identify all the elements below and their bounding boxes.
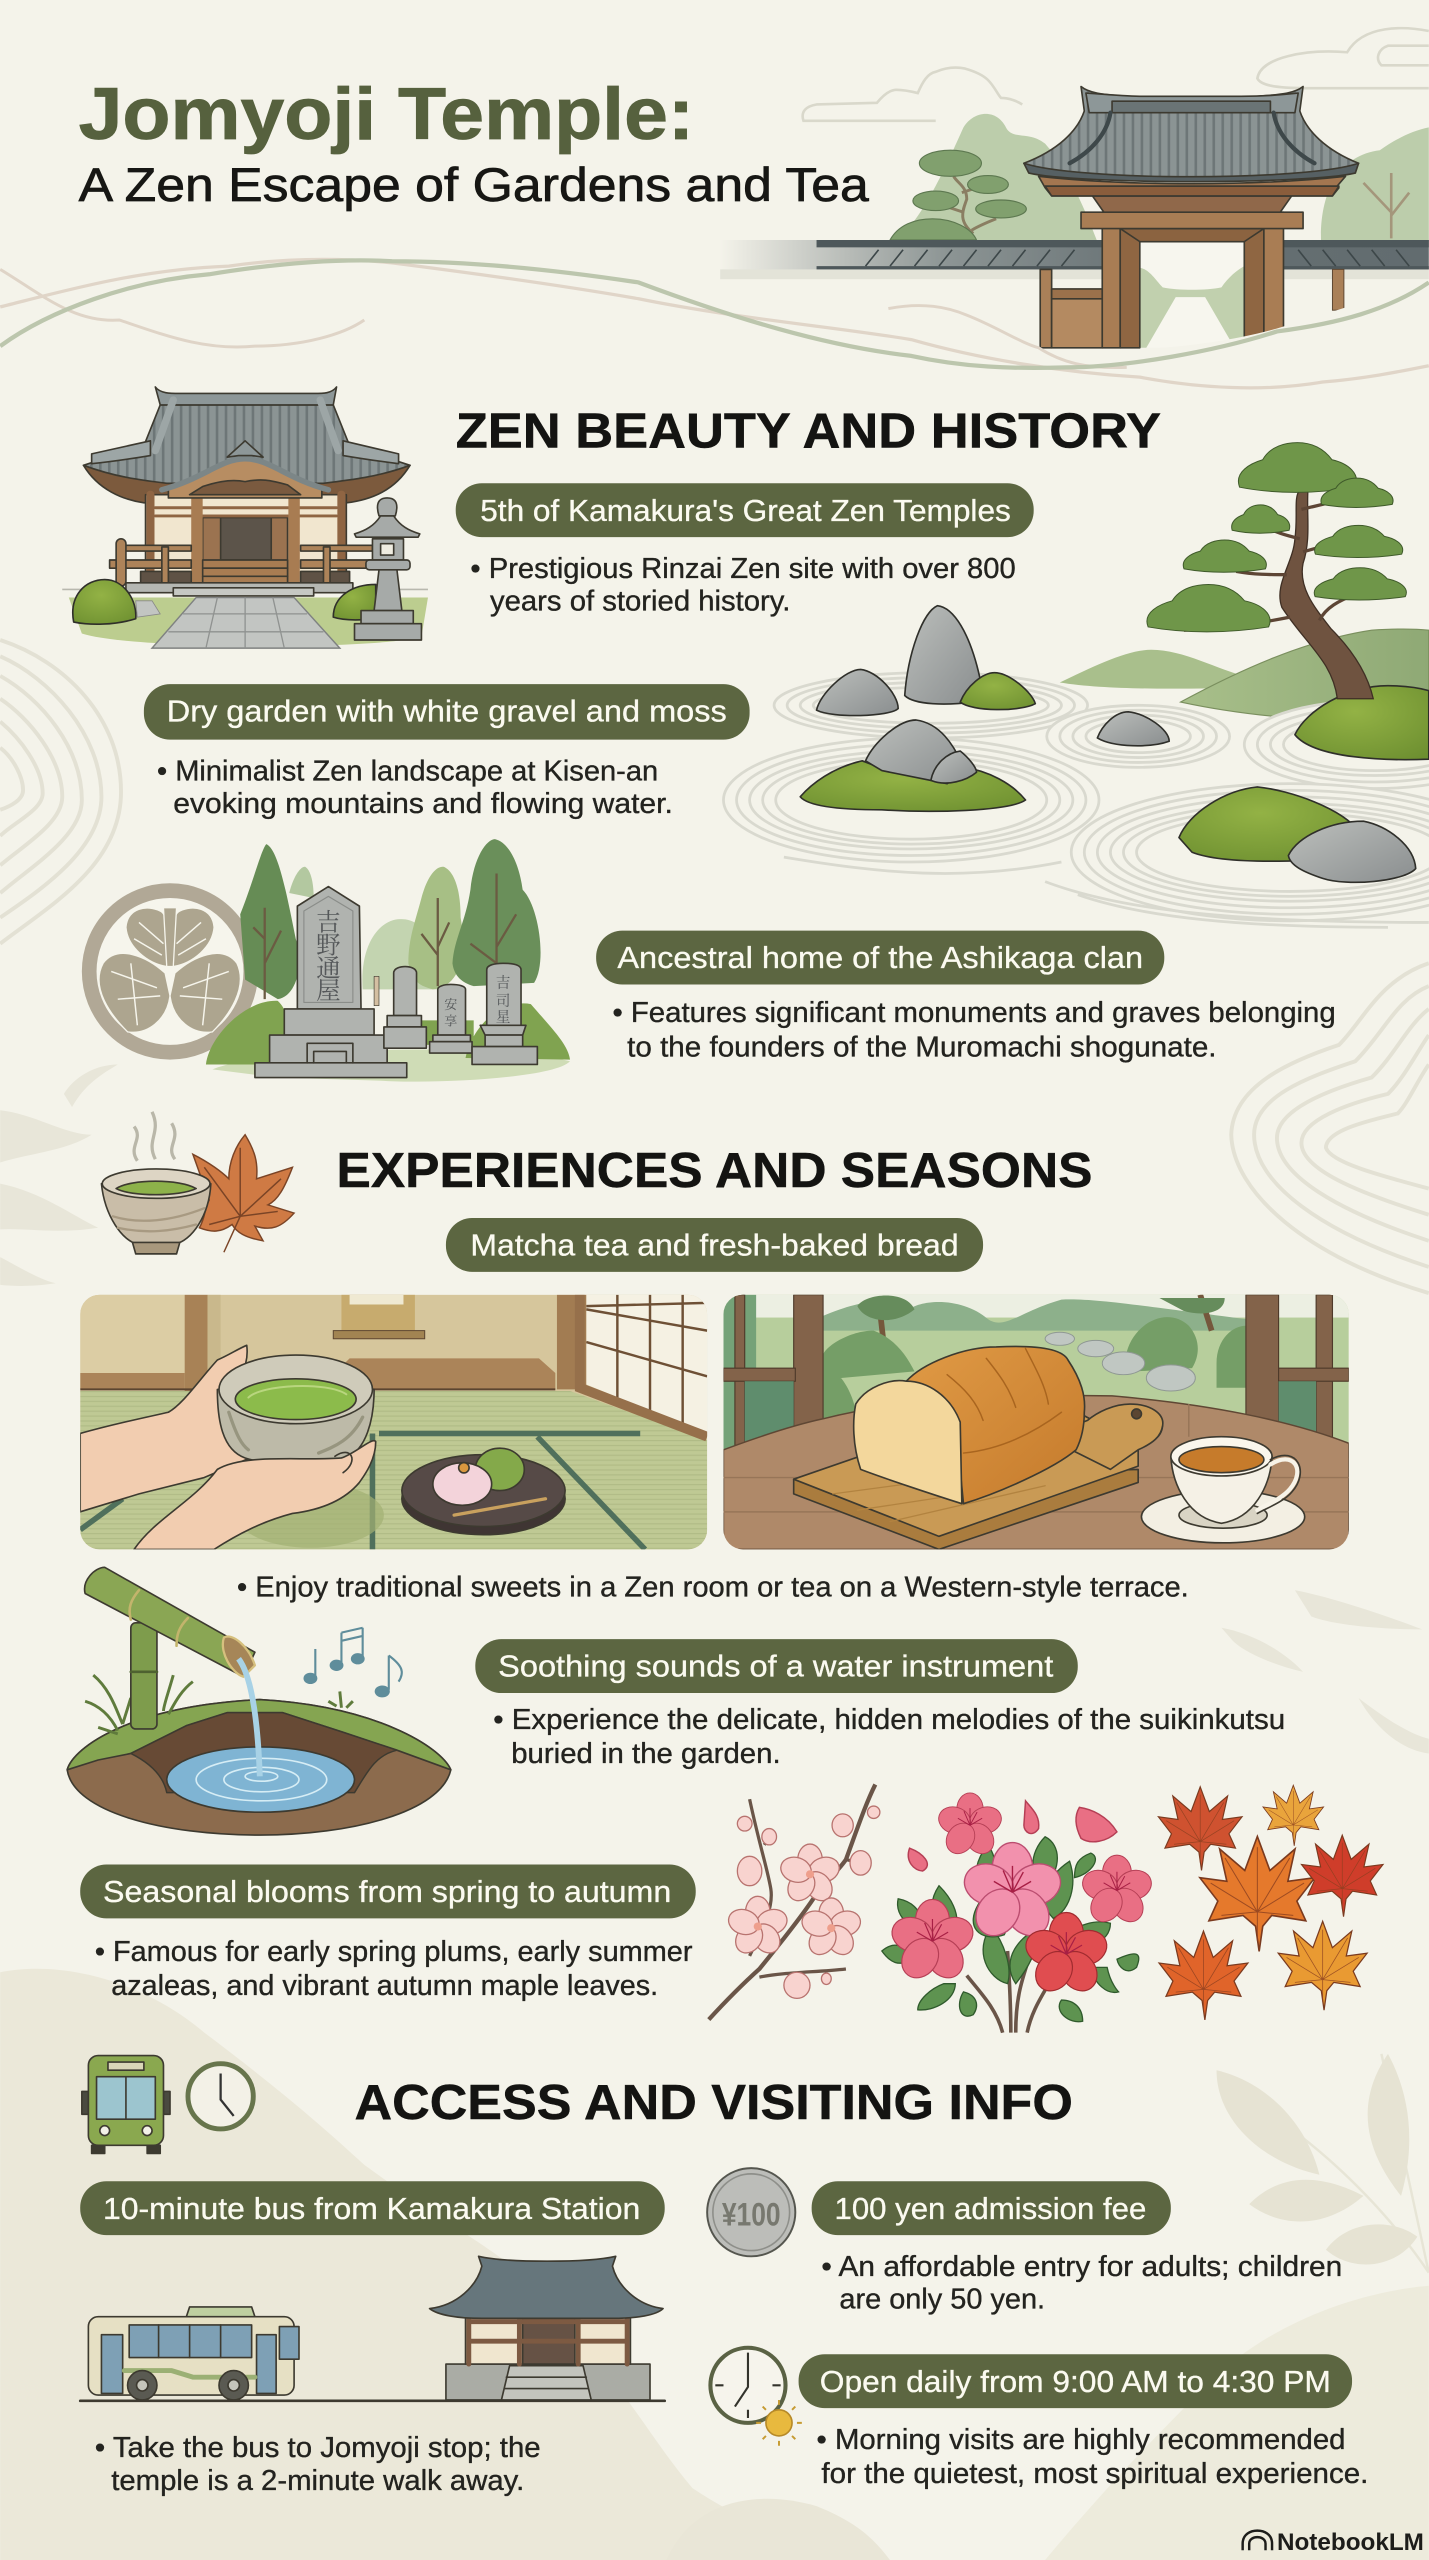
icon: azalea bush bbox=[882, 1793, 1155, 2033]
rocks and moss bbox=[800, 606, 1429, 882]
pill: admission fee: 100 yen admission fee bbox=[835, 2193, 1146, 2226]
tatami floor bbox=[80, 1391, 707, 1549]
pill: 5th of Kamakura's bbox=[456, 483, 1034, 537]
inscriptions: 野 bbox=[316, 926, 341, 961]
gravel: middle rings bbox=[1047, 705, 1230, 767]
gable bbox=[168, 459, 322, 498]
text: Rinzai Zen: years of storied history. bbox=[490, 586, 790, 618]
icon: tea bowl and maple leaf bbox=[101, 1112, 294, 1254]
pill: seasonal blooms: Seasonal blooms from spring to autumn bbox=[103, 1876, 671, 1909]
trees right bbox=[1363, 173, 1409, 238]
icon: stone lantern bbox=[354, 498, 421, 640]
section: access and visiting info bbox=[80, 2056, 1368, 2497]
bushes bbox=[73, 580, 136, 624]
icon: 100 yen coin bbox=[707, 2168, 795, 2256]
hanging scroll bbox=[333, 1295, 425, 1339]
temple wall bbox=[720, 240, 1429, 348]
pine bbox=[890, 150, 1026, 240]
pill: Ashikaga bbox=[596, 931, 1164, 984]
view through gate bbox=[1140, 242, 1244, 348]
maple leaf bbox=[193, 1135, 294, 1252]
icon: clouds bbox=[803, 28, 1429, 121]
gravel: top rings bbox=[774, 673, 1088, 738]
hills bbox=[895, 114, 1429, 242]
cutting board bbox=[794, 1404, 1163, 1549]
table bbox=[723, 1395, 1349, 1549]
text: admission: • An affordable entry for adults; children bbox=[821, 2251, 1342, 2283]
ripples bbox=[196, 1758, 327, 1801]
shoji screen bbox=[580, 1295, 707, 1437]
text: Kisen-an: evoking mountains and flowing water. bbox=[173, 788, 673, 820]
inscriptions: 安 bbox=[444, 994, 457, 1013]
title line 2: A Zen Escape of Gardens and Tea bbox=[79, 159, 870, 212]
inscriptions: 司 bbox=[496, 990, 510, 1011]
roof bbox=[83, 405, 410, 483]
image: bread on terrace bbox=[723, 1295, 1349, 1549]
ground and bushes bbox=[212, 1050, 570, 1082]
icon: temple at bus stop bbox=[430, 2256, 663, 2400]
pill: water instrument: Soothing sounds of a water instrument bbox=[498, 1651, 1054, 1684]
pill: water instrument bbox=[475, 1639, 1078, 1693]
gravel: right rings bbox=[1244, 700, 1429, 789]
mask below the ribbon bbox=[1120, 279, 1429, 392]
matcha bowl bbox=[217, 1355, 374, 1464]
text: morning visits bbox=[817, 2424, 1368, 2490]
pill: seasonal blooms bbox=[80, 1864, 696, 1918]
text: admission: are only 50 yen. bbox=[839, 2284, 1045, 2316]
gravel: bottom right rings bbox=[1071, 784, 1429, 921]
gate roof bbox=[1024, 87, 1359, 196]
gate posts bbox=[1081, 196, 1303, 348]
header illustration: clouds, hills and temple gate bbox=[720, 28, 1429, 392]
text: monuments bbox=[612, 997, 1336, 1063]
background: left raked swirl bbox=[0, 640, 121, 944]
background: beige hills and leaves bbox=[0, 1969, 1429, 2560]
inscriptions: 屋 bbox=[316, 972, 341, 1007]
left fence panel bbox=[1040, 269, 1102, 348]
image: matcha in tatami room bbox=[80, 1295, 707, 1549]
icon: family crest bbox=[89, 891, 251, 1052]
icon: plum blossom branch bbox=[709, 1784, 880, 2020]
title line 1: Jomyoji Temple: bbox=[79, 72, 694, 155]
text: morning visits: • Morning visits are highly recommended bbox=[817, 2424, 1346, 2456]
icon: 100 yen coin: ¥100 bbox=[722, 2195, 781, 2232]
water stream bbox=[239, 1659, 260, 1776]
hands bbox=[80, 1345, 376, 1549]
text: seasonal blooms: • Famous for early spring plums, early summer bbox=[95, 1936, 693, 1968]
pill: dry garden: Dry garden with white gravel and moss bbox=[167, 696, 727, 729]
gravestones bbox=[255, 887, 537, 1078]
text: Rinzai Zen bbox=[470, 553, 1016, 618]
background: brush strokes bbox=[0, 1064, 1429, 1753]
pill: bus from station: 10-minute bus from Kamakura Station bbox=[103, 2193, 640, 2226]
text: suikinkutsu: • Experience the delicate, hidden melodies of the suikinkutsu bbox=[493, 1704, 1285, 1736]
section: Zen beauty and history bbox=[62, 387, 1429, 1082]
text: Rinzai Zen: • Prestigious Rinzai Zen site with over 800 bbox=[470, 553, 1016, 585]
ledge bbox=[80, 1358, 555, 1389]
ground bbox=[67, 1700, 451, 1835]
icon: autumn maple leaves bbox=[1158, 1785, 1383, 2020]
pill: dry garden bbox=[144, 684, 750, 740]
icon: clock with sun bbox=[710, 2348, 802, 2446]
grass bbox=[85, 1675, 353, 1734]
inscriptions: 吉 bbox=[316, 904, 341, 939]
section: experiences and seasons bbox=[67, 1112, 1383, 2033]
icon: bus front bbox=[82, 2056, 170, 2153]
illustration: dry garden bbox=[723, 443, 1429, 927]
trees bbox=[240, 839, 541, 999]
inscriptions: 通 bbox=[316, 949, 341, 984]
text: bus directions: • Take the bus to Jomyoji stop; the bbox=[95, 2432, 541, 2464]
inscriptions bbox=[316, 904, 511, 1029]
text: bus directions bbox=[95, 2432, 541, 2497]
text: monuments: to the founders of the Muromachi shogunate. bbox=[627, 1031, 1217, 1063]
text: seasonal blooms bbox=[95, 1936, 693, 2002]
pill: opening hours: Open daily from 9:00 AM to 4:30 PM bbox=[820, 2366, 1331, 2399]
hills behind bbox=[1060, 650, 1249, 689]
text: traditional sweets: • Enjoy traditional sweets in a Zen room or tea on a Western-style terrace. bbox=[237, 1572, 1189, 1604]
inscriptions: 吉 bbox=[496, 972, 510, 993]
text: seasonal blooms: azaleas, and vibrant autumn maple leaves. bbox=[111, 1970, 658, 2002]
heading: ZEN BEAUTY AND HISTORY bbox=[456, 404, 1161, 458]
pine tree bbox=[1147, 443, 1406, 699]
bamboo spout bbox=[85, 1567, 255, 1729]
background: right raked swirl bbox=[1231, 963, 1429, 1293]
tea cup and saucer bbox=[1141, 1437, 1305, 1543]
pill: Ashikaga: Ancestral home of the Ashikaga clan bbox=[617, 942, 1143, 975]
gravel: island rings bbox=[723, 738, 1099, 862]
title bbox=[79, 72, 870, 212]
pill: matcha: Matcha tea and fresh-baked bread bbox=[470, 1230, 959, 1263]
pill: 5th of Kamakura's: 5th of Kamakura's Great Zen Temples bbox=[480, 495, 1011, 528]
icon: clock bbox=[188, 2064, 253, 2129]
window frame bbox=[723, 1295, 1349, 1458]
text: suikinkutsu: buried in the garden. bbox=[511, 1738, 781, 1770]
illustration: Ashikaga crest and graves bbox=[89, 839, 570, 1082]
heading: EXPERIENCES AND SEASONS bbox=[337, 1144, 1092, 1198]
pill: bus from station bbox=[80, 2181, 665, 2235]
pill: admission fee bbox=[812, 2181, 1171, 2235]
railing bbox=[141, 571, 350, 584]
plate with sweets bbox=[402, 1448, 565, 1535]
text: Kisen-an: • Minimalist Zen landscape at Kisen-an bbox=[157, 755, 658, 787]
text: admission bbox=[821, 2251, 1342, 2316]
text: bus directions: temple is a 2-minute walk away. bbox=[111, 2465, 524, 2497]
raked gravel bbox=[723, 673, 1429, 927]
icon: bus side view and road bbox=[80, 2307, 665, 2401]
icon: temple hall with lantern bbox=[62, 387, 428, 648]
music notes bbox=[305, 1628, 402, 1696]
text: morning visits: for the quietest, most spiritual experience. bbox=[821, 2458, 1368, 2490]
text: monuments: • Features significant monuments and graves belonging bbox=[612, 997, 1336, 1029]
inscriptions: 享 bbox=[444, 1010, 457, 1029]
platform bbox=[126, 583, 353, 593]
pill: matcha bbox=[446, 1218, 983, 1272]
pill: opening hours bbox=[799, 2354, 1352, 2408]
illustration: suikinkutsu bbox=[67, 1567, 451, 1835]
bread loaf bbox=[854, 1346, 1085, 1504]
inscriptions: 星 bbox=[496, 1006, 511, 1027]
decorative flowing ribbons bbox=[0, 260, 1429, 388]
NotebookLM badge: NotebookLM bbox=[1277, 2530, 1424, 2556]
text: suikinkutsu bbox=[493, 1704, 1285, 1770]
text: Kisen-an bbox=[157, 755, 673, 820]
stepping stones bbox=[1045, 1332, 1195, 1391]
heading: ACCESS AND VISITING INFO bbox=[355, 2076, 1073, 2130]
leaves bbox=[882, 1837, 1139, 2022]
